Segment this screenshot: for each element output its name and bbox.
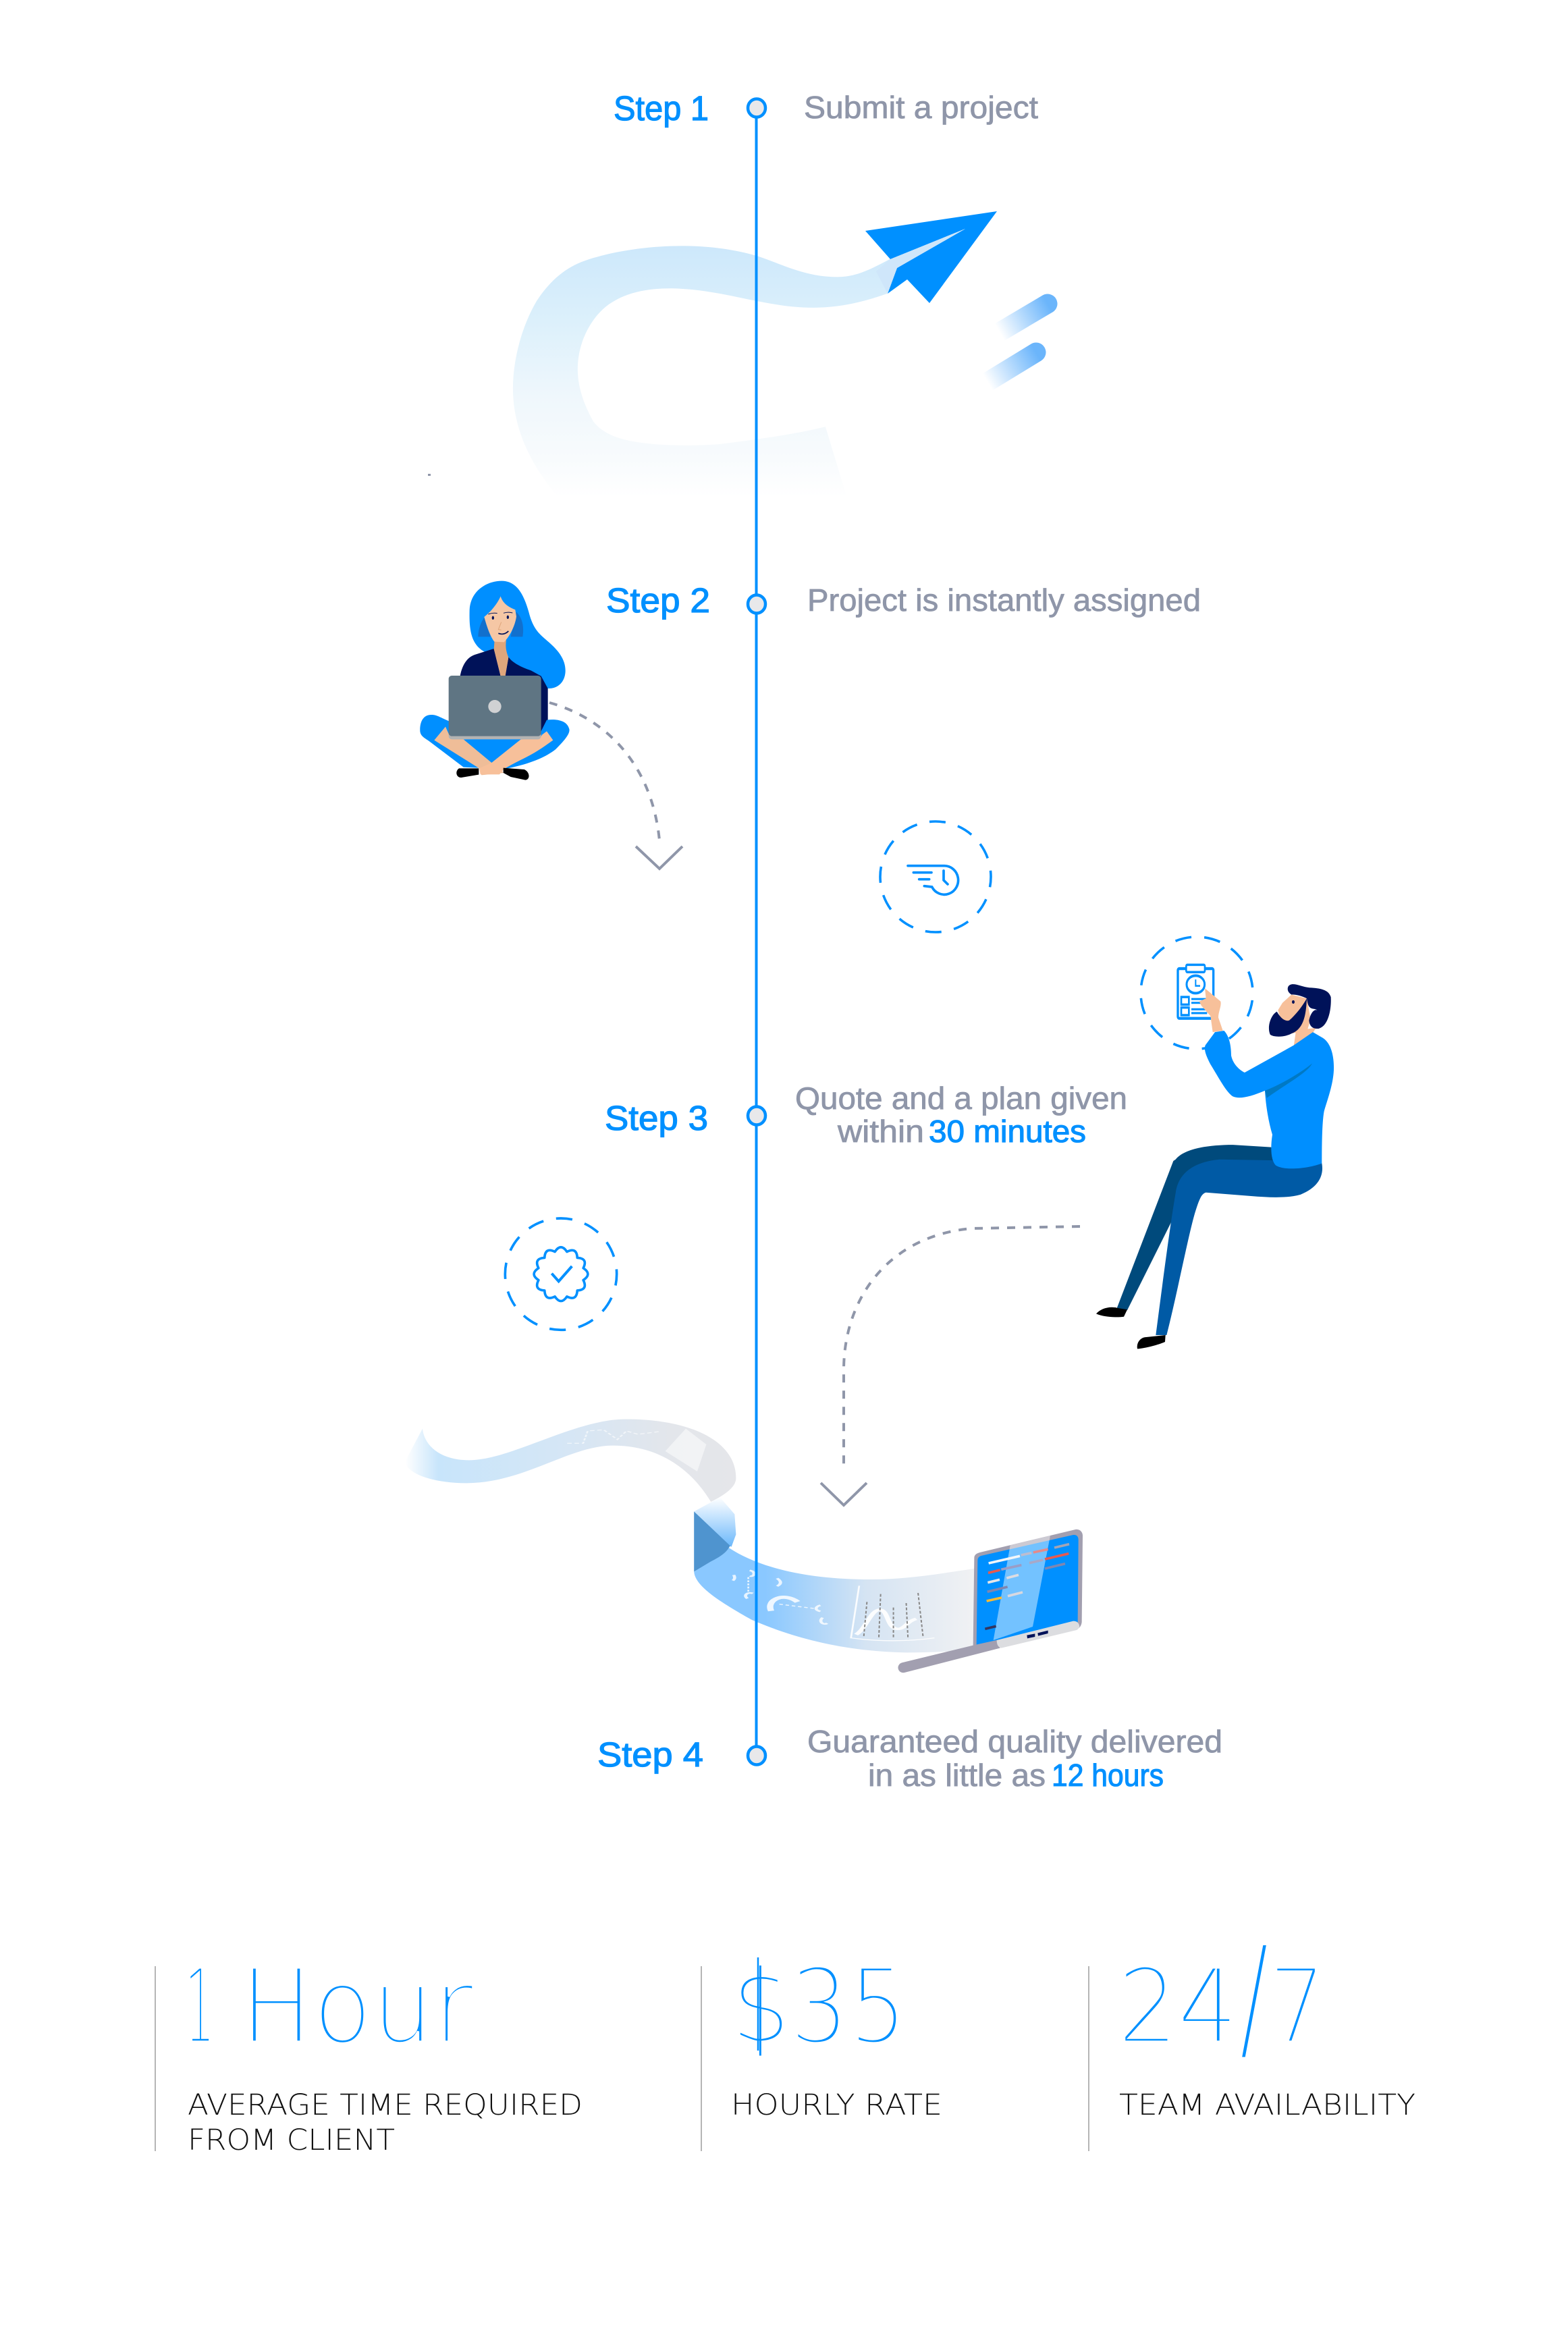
icon: paper plane	[865, 211, 997, 303]
stat: average time: FROM CLIENT	[188, 2124, 395, 2157]
icon: clipboard in dashed circle	[1133, 929, 1260, 1056]
stat: team availability: TEAM AVAILABILITY	[1119, 2089, 1415, 2122]
stray dot	[428, 474, 431, 476]
step 3 description: Quote and a plan given	[795, 1081, 1127, 1116]
illustration: man with beard	[1096, 984, 1334, 1349]
stat: average time	[155, 1947, 583, 2157]
step 4 description: in as little as	[868, 1758, 1046, 1793]
step 3 marker	[748, 1107, 765, 1125]
illustration: data ribbon	[405, 1419, 980, 1652]
stat: hourly rate	[701, 1947, 942, 2151]
arrow: dashed from man	[821, 1226, 1080, 1505]
stat: hourly rate: HOURLY RATE	[731, 2089, 942, 2122]
paper plane trail	[513, 246, 890, 497]
stat: average time: AVERAGE TIME REQUIRED	[188, 2089, 583, 2122]
illustration: woman with laptop	[420, 581, 570, 780]
illustration: open laptop	[898, 1529, 1083, 1673]
step 1 heading: Step 1	[614, 89, 709, 128]
step 4 description: 12 hours	[1052, 1758, 1164, 1793]
step 4 marker	[748, 1747, 765, 1764]
step 4 description	[807, 1724, 1222, 1793]
speed streak 2	[984, 352, 1036, 384]
step 3 description: within	[837, 1114, 924, 1149]
step 1 marker	[748, 99, 765, 117]
stat: team availability: /	[1240, 1918, 1268, 2078]
step 4 description: Guaranteed quality delivered	[807, 1724, 1222, 1759]
stat: hourly rate: $35	[732, 1947, 907, 2066]
stat: average time: Hour	[240, 1947, 473, 2066]
stat: team availability	[1089, 1918, 1415, 2151]
step 3 description: 30 minutes	[929, 1114, 1086, 1149]
stat: team availability: 24	[1118, 1947, 1238, 2066]
step 2 marker	[748, 595, 765, 613]
step 4 heading: Step 4	[597, 1735, 703, 1774]
speed streak 1	[996, 304, 1048, 334]
timeline line	[755, 108, 757, 1755]
step 3 heading: Step 3	[605, 1099, 708, 1137]
arrow: dashed from woman	[549, 703, 682, 869]
step 3 description	[795, 1081, 1127, 1149]
step 1 description: Submit a project	[804, 90, 1038, 125]
icon: quality badge in dashed circle	[500, 1214, 622, 1334]
step 2 heading: Step 2	[606, 581, 710, 620]
stat: team availability: 7	[1269, 1947, 1326, 2066]
stat: average time: 1	[185, 1947, 215, 2066]
icon: speed clock in dashed circle	[875, 816, 996, 938]
step 2 description: Project is instantly assigned	[807, 582, 1201, 618]
